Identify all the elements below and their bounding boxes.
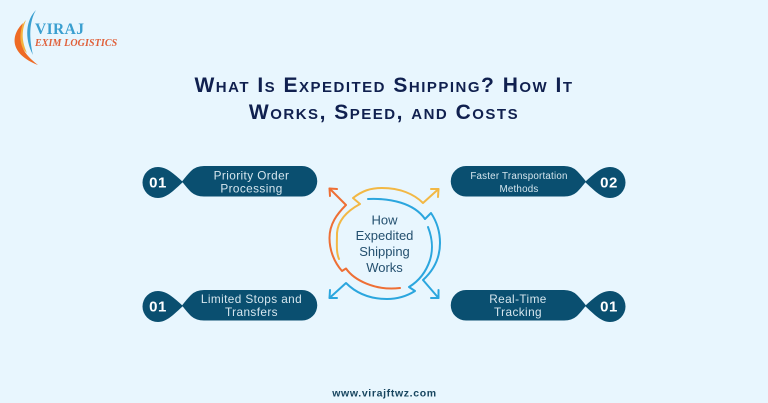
center label: Expedited [356,228,413,243]
step: Faster Transportation Methods: Methods [500,184,538,195]
step: Priority Order Processing: 01 [149,174,167,192]
step: Real-Time Tracking: Real-Time [489,292,547,306]
step: Real-Time Tracking: 01 [600,298,618,316]
step: Limited Stops and Transfers: Transfers [225,305,278,319]
center label: Shipping [359,244,410,259]
step: Real-Time Tracking [451,290,626,322]
circular arrows diagram [330,188,440,299]
step: Priority Order Processing [142,166,317,198]
center label: Works [366,260,403,275]
logo: VIRAJ [35,21,84,38]
step: Limited Stops and Transfers [142,290,317,322]
step: Faster Transportation Methods: Faster Transportation [470,171,568,182]
title: Works, Speed, and Costs [249,101,519,124]
center label: How [371,212,398,228]
center label [356,212,413,275]
yellow arrow [337,188,438,259]
step: Priority Order Processing: Priority Order [214,168,289,182]
title: What Is Expedited Shipping? How It [194,74,574,97]
logo [15,10,118,65]
orange arrow [330,188,400,289]
blue arrow bottom [330,227,432,299]
logo: EXIM LOGISTICS [34,38,118,49]
step: Faster Transportation Methods: 02 [600,174,618,192]
title [194,74,574,124]
website: www.virajftwz.com [331,388,437,400]
step: Limited Stops and Transfers: Limited Stops and [201,292,302,306]
step: Faster Transportation Methods [451,166,626,198]
step: Real-Time Tracking: Tracking [494,305,542,319]
step: Limited Stops and Transfers: 01 [149,298,167,316]
blue arrow right [368,199,440,298]
step: Priority Order Processing: Processing [220,182,283,196]
